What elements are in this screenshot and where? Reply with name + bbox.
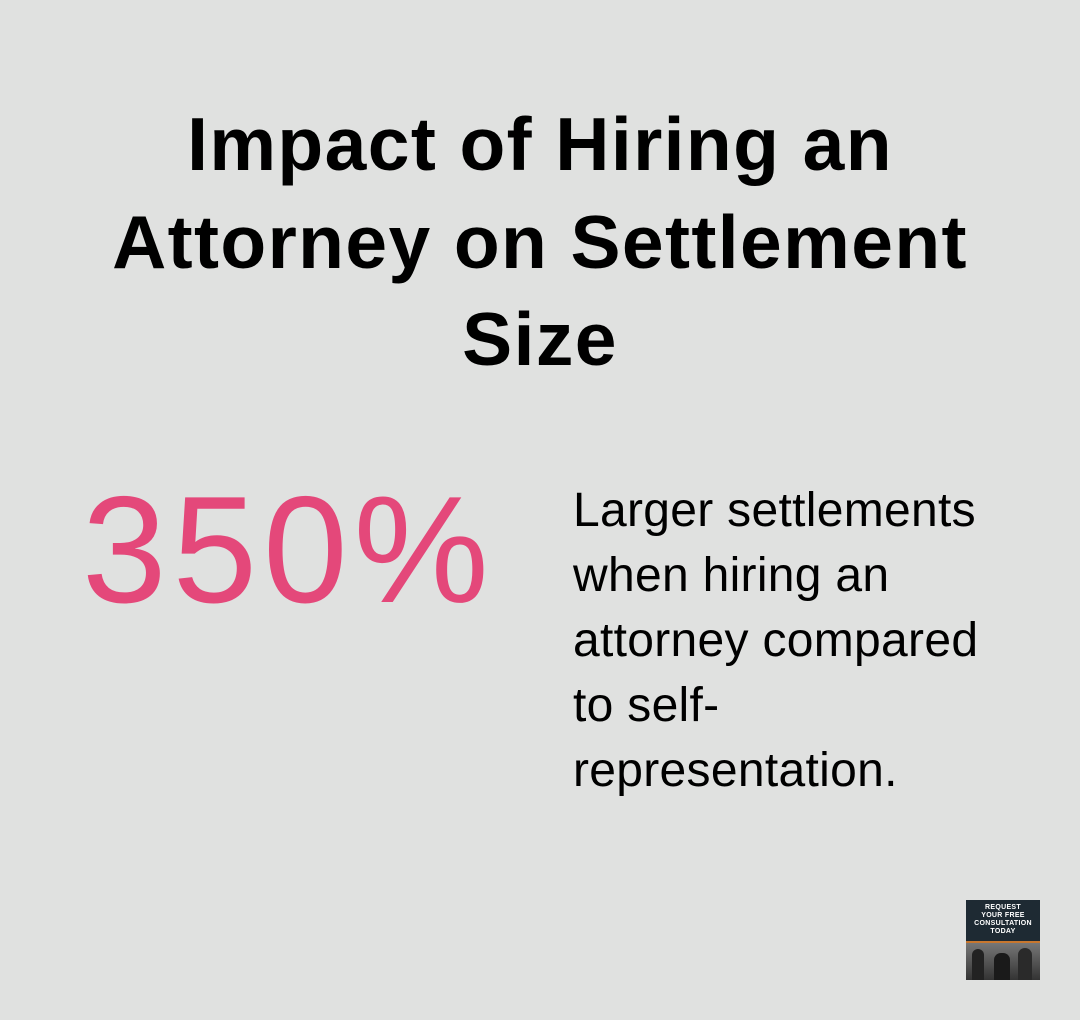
stat description [573,484,978,797]
badge: request consultation: TODAY [990,928,1016,935]
title [112,102,968,381]
stat description: Larger settlements [573,484,976,537]
title: Attorney on Settlement [112,200,968,284]
stat description: to self- [573,679,719,732]
badge: request consultation: YOUR FREE [981,912,1025,919]
stat description: representation. [573,744,898,797]
stat description: when hiring an [573,549,889,602]
badge: request consultation [966,900,1040,980]
title: Size [462,297,618,381]
stat description: attorney compared [573,614,978,667]
badge: request consultation: CONSULTATION [974,920,1032,927]
badge: request consultation: REQUEST [985,904,1021,911]
big stat: 350%: 350% [82,465,495,635]
title: Impact of Hiring an [187,102,893,186]
